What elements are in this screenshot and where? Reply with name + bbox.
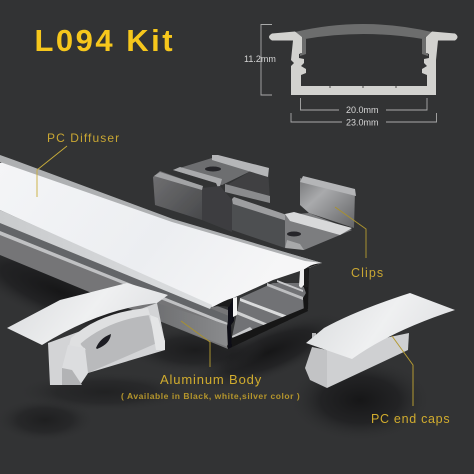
aluminium interior (232, 283, 307, 337)
dimension lines (261, 24, 436, 122)
right end cap (305, 293, 455, 388)
profile cross-section diagram: 11.2mm (244, 54, 276, 64)
title: L094 Kit (34, 23, 175, 58)
profile cross-section diagram: 20.0mm (346, 105, 379, 115)
profile cross-section diagram (244, 24, 458, 128)
profile cross-section diagram: 23.0mm (346, 118, 379, 128)
right clip (285, 176, 356, 250)
diffuser (0, 160, 322, 307)
left clip (153, 155, 287, 248)
label: PC end caps (371, 336, 450, 426)
left end cap (7, 283, 168, 385)
diffuser clip legs (300, 37, 428, 56)
label: PC Diffuser: PC Diffuser (47, 131, 120, 145)
label: Aluminum Body: ( Available in Black, white,silver color ) (121, 391, 300, 401)
label: Clips: Clips (351, 266, 384, 280)
label: PC Diffuser (37, 131, 120, 197)
product illustration (0, 155, 455, 388)
diffuser section (295, 24, 432, 39)
aluminium rail below diffuser (0, 215, 228, 349)
label: PC end caps: PC end caps (371, 412, 450, 426)
floor shadows (0, 219, 432, 442)
aluminium body section (269, 32, 458, 95)
floor ticks (330, 86, 396, 88)
black profile walls (227, 307, 308, 349)
label: Aluminum Body: Aluminum Body (160, 372, 262, 387)
label: Aluminum Body (121, 321, 300, 401)
label: Clips (335, 207, 384, 280)
